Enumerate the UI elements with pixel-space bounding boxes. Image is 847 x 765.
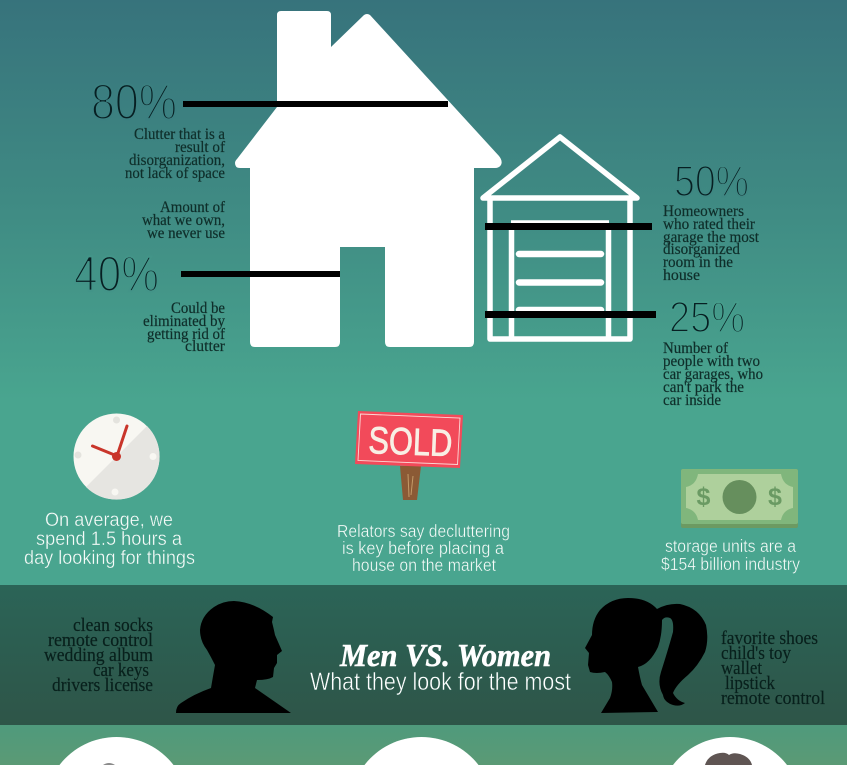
list: women: wallet [721,659,763,679]
icon: dollar bill: $ [697,483,711,511]
text: sold caption: is key before placing a [342,538,504,558]
text: amount we never use [142,199,226,242]
text: amount we never use: Amount of [160,199,226,216]
stat: 50%: 50% [674,157,749,206]
stat: 80%: not lack of space [125,165,225,182]
icon: house [235,11,502,347]
text: amount we never use: what we own, [142,212,225,229]
icon: garage [483,137,637,339]
stat: 80%: Clutter that is a [134,126,225,143]
stat: 50%: disorganized [663,241,740,258]
list: women: child's toy [721,644,792,664]
list: men: clean socks [73,616,153,636]
portrait circle: right [673,737,787,765]
stat: 40%: clutter [185,338,226,355]
icon: dollar bill [681,469,798,528]
icon: dollar bill: $ [768,483,782,511]
list: men: drivers license [52,676,153,696]
panel: bottom strip with portraits [0,725,847,765]
stat: 40% [74,246,340,355]
text: money caption: $154 billion industry [661,554,800,574]
stat: 80%: 80% [91,74,177,130]
stat: 40%: eliminated by [143,313,225,330]
stat: 25%: Number of [663,340,729,357]
stat: 25%: 25% [669,293,745,342]
text: amount we never use: we never use [147,225,225,242]
list: women: remote control [721,689,825,709]
text: sold caption: house on the market [352,555,496,575]
heading: men vs women: Men VS. Women [339,637,551,673]
stat: 25%: can't park the [663,379,744,396]
list: men: car keys [93,661,149,681]
text: clock caption: spend 1.5 hours a [36,528,182,550]
text: clock caption [24,509,195,569]
stat: 40%: getting rid of [147,326,226,343]
stat: 25%: car inside [663,392,721,409]
icon: woman silhouette [585,598,707,713]
stat: 50%: Homeowners [663,203,744,220]
text: sold caption [337,521,510,575]
stat: 80%: result of [175,139,226,156]
stat: 25%: people with two [663,353,760,370]
icon: sold sign: SOLD [368,420,453,465]
stat: 50%: garage the most [663,229,760,246]
text: clock caption: day looking for things [24,547,195,569]
text: sold caption: Relators say decluttering [337,521,510,541]
text: clock caption: On average, we [45,509,173,531]
panel: men vs women [0,585,847,725]
stat: 40%: Could be [171,300,225,317]
stat: 50%: who rated their [663,216,756,233]
list: women: lipstick [725,674,776,694]
stat: 80%: disorganization, [129,152,225,169]
stat: 40%: 40% [74,246,159,302]
icon: man silhouette [176,601,291,713]
subheading: What they look for the most [310,668,571,696]
text: money caption [661,536,800,574]
text: money caption: storage units are a [665,536,796,556]
stat: 50%: room in the [663,254,733,271]
icon: sold sign [355,411,463,500]
list: women: favorite shoes [721,629,818,649]
stat: 50%: house [663,267,700,284]
list: men: wedding album [44,646,154,666]
portrait circle: left [60,737,174,765]
stat: 80% [91,74,448,182]
stat: 50% [485,157,760,284]
stat: 25%: car garages, who [663,366,763,383]
list: women [721,629,825,709]
icon: clock [74,414,160,500]
stat: 25% [485,293,763,409]
portrait circle: middle [364,737,478,765]
list: men [44,616,154,696]
list: men: remote control [48,631,153,651]
